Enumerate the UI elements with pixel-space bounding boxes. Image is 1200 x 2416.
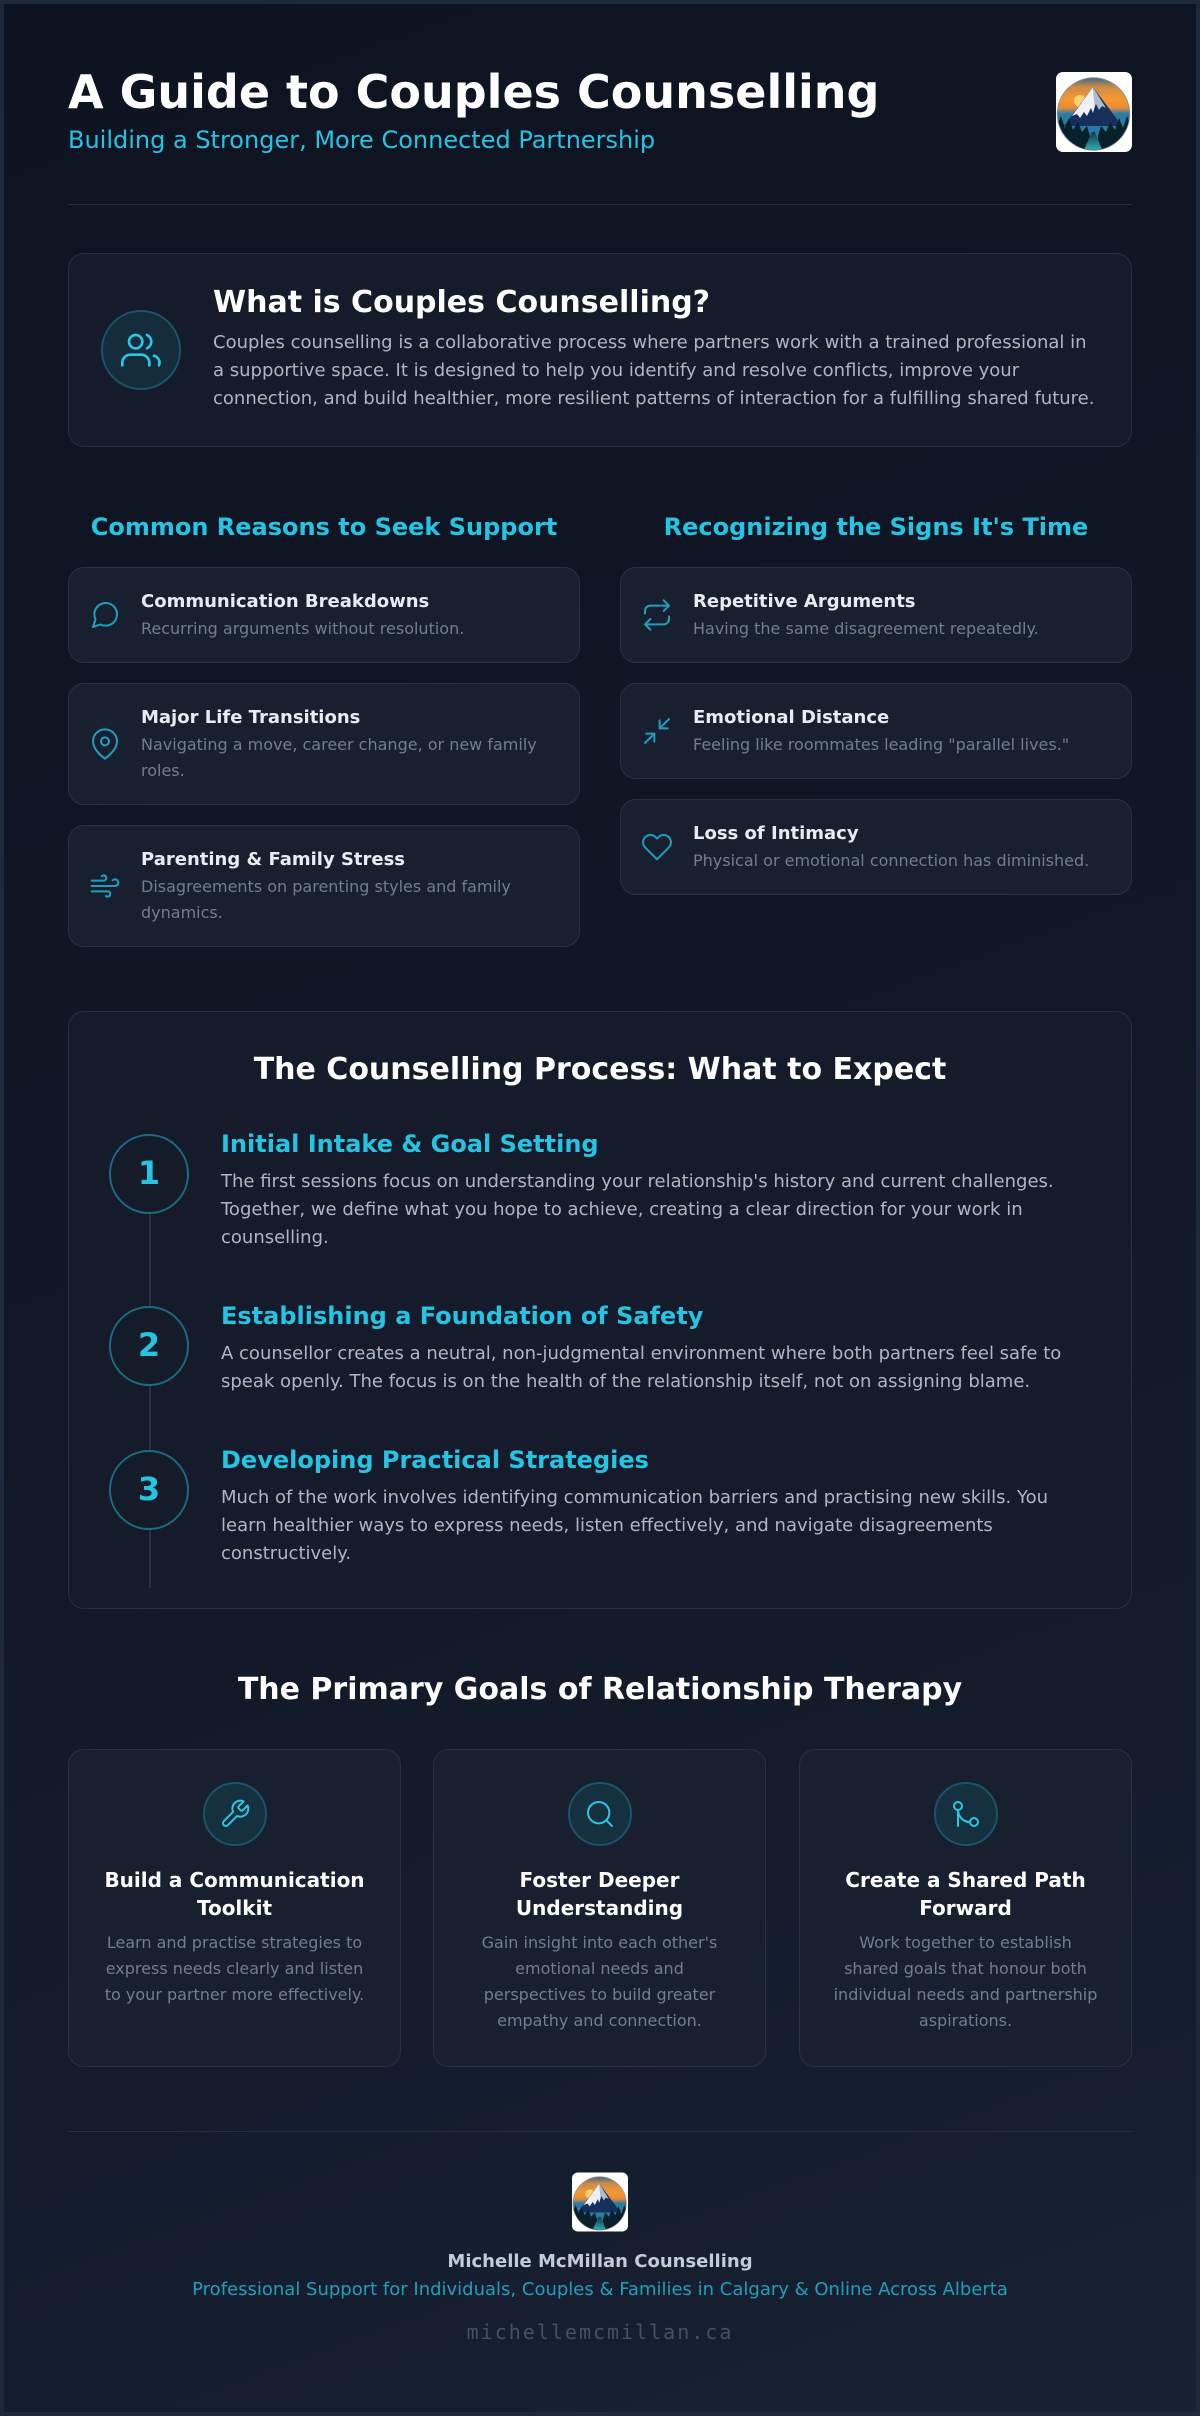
card: emotional distance bbox=[620, 683, 1132, 779]
card: loss of intimacy: Physical or emotional connection has diminished. bbox=[693, 851, 1089, 870]
card: major life transitions bbox=[68, 683, 580, 805]
panel: what is couples counselling bbox=[68, 253, 1132, 447]
step 3 text: constructively. bbox=[221, 1543, 351, 1564]
description: Couples counselling is a collaborative process where partners work with a trained professional in bbox=[213, 332, 1087, 353]
step 2 text: speak openly. The focus is on the health of the relationship itself, not on assigning blame. bbox=[221, 1371, 1030, 1392]
step 3 heading: Developing Practical Strategies bbox=[221, 1446, 649, 1474]
card: shared path: Create a Shared Path bbox=[845, 1868, 1086, 1892]
card: shared path: Work together to establish bbox=[859, 1933, 1072, 1952]
card: deeper understanding: emotional needs and bbox=[515, 1959, 684, 1978]
description: connection, and build healthier, more resilient patterns of interaction for a fulfilling shared future. bbox=[213, 388, 1094, 409]
icon: wrench bbox=[202, 1782, 266, 1846]
card: loss of intimacy bbox=[620, 799, 1132, 895]
card: communication breakdowns bbox=[68, 567, 580, 663]
step 1 text: Together, we define what you hope to achieve, creating a clear direction for your work in bbox=[221, 1199, 1023, 1220]
card: communication toolkit: to your partner more effectively. bbox=[105, 1985, 364, 2004]
card: parenting and family stress: dynamics. bbox=[141, 903, 223, 922]
heading: What is Couples Counselling? bbox=[213, 285, 710, 320]
card: shared path: Forward bbox=[919, 1896, 1012, 1920]
footer divider bbox=[68, 2131, 1132, 2132]
card: major life transitions: roles. bbox=[141, 761, 185, 780]
card: deeper understanding: Foster Deeper bbox=[520, 1868, 679, 1892]
card: major life transitions: Navigating a move, career change, or new family bbox=[141, 735, 537, 754]
description: a supportive space. It is designed to help you identify and resolve conflicts, improve your bbox=[213, 360, 1019, 381]
card: parenting and family stress bbox=[68, 825, 580, 947]
icon: users bbox=[101, 310, 181, 390]
panel: counselling process bbox=[68, 1011, 1132, 1609]
card: repetitive arguments: Repetitive Arguments bbox=[693, 591, 916, 612]
step 1 text bbox=[220, 1171, 1054, 1248]
card: deeper understanding: empathy and connection. bbox=[497, 2011, 702, 2030]
step 2 text: A counsellor creates a neutral, non-judgmental environment where both partners feel safe to bbox=[221, 1343, 1061, 1364]
footer name: Michelle McMillan Counselling bbox=[447, 2251, 753, 2272]
icon: merge path bbox=[934, 1782, 998, 1846]
step 2 heading: Establishing a Foundation of Safety bbox=[221, 1302, 703, 1330]
title: A Guide to Couples Counselling bbox=[68, 65, 879, 119]
card: communication toolkit: Toolkit bbox=[197, 1896, 272, 1920]
step 1 number: 1 bbox=[138, 1154, 160, 1192]
heading: counselling process: The Counselling Process: What to Expect bbox=[254, 1052, 946, 1087]
icon: search bbox=[568, 1782, 632, 1846]
card: communication toolkit: Learn and practise strategies to bbox=[107, 1933, 362, 1952]
step 3 number: 3 bbox=[138, 1470, 160, 1508]
step 3 text bbox=[221, 1487, 1048, 1564]
icon: mountain logo bbox=[1056, 72, 1132, 152]
card: communication breakdowns: Communication Breakdowns bbox=[141, 591, 429, 612]
card: deeper understanding: perspectives to build greater bbox=[484, 1985, 715, 2004]
card: communication toolkit: express needs clearly and listen bbox=[106, 1959, 363, 1978]
step 3 text: Much of the work involves identifying communication barriers and practising new skills. You bbox=[221, 1487, 1048, 1508]
card: communication toolkit: Build a Communication bbox=[104, 1868, 365, 1892]
step 3 number bbox=[109, 1450, 189, 1530]
card: deeper understanding bbox=[433, 1749, 766, 2067]
header divider bbox=[68, 204, 1132, 205]
subtitle: Building a Stronger, More Connected Partnership bbox=[68, 126, 655, 154]
card: parenting and family stress: Disagreements on parenting styles and family bbox=[141, 877, 511, 896]
step 1 text: counselling. bbox=[221, 1227, 329, 1248]
card: major life transitions: Major Life Transitions bbox=[141, 707, 360, 728]
icon: footer logo bbox=[572, 2172, 628, 2232]
footer website: michellemcmillan.ca bbox=[467, 2320, 733, 2344]
card: communication toolkit bbox=[68, 1749, 401, 2067]
heading: common reasons: Common Reasons to Seek Support bbox=[91, 513, 557, 541]
card: loss of intimacy: Loss of Intimacy bbox=[693, 823, 859, 844]
footer tagline: Professional Support for Individuals, Couples & Families in Calgary & Online Across Alberta bbox=[192, 2279, 1008, 2300]
step 2 number: 2 bbox=[138, 1326, 160, 1364]
card: shared path: shared goals that honour both bbox=[844, 1959, 1087, 1978]
step 3 text: learn healthier ways to express needs, listen effectively, and navigate disagreements bbox=[221, 1515, 993, 1536]
step 1 text: The first sessions focus on understanding your relationship's history and current challenges. bbox=[221, 1171, 1054, 1192]
step 2 number bbox=[109, 1306, 189, 1386]
heading: recognizing signs: Recognizing the Signs It's Time bbox=[664, 513, 1088, 541]
step 2 text bbox=[221, 1343, 1061, 1392]
card: deeper understanding: Understanding bbox=[516, 1896, 683, 1920]
card: deeper understanding: Gain insight into each other's bbox=[482, 1933, 717, 1952]
card: parenting and family stress: Parenting & Family Stress bbox=[141, 849, 405, 870]
card: emotional distance: Feeling like roommates leading "parallel lives." bbox=[693, 735, 1069, 754]
card: shared path: individual needs and partnership bbox=[834, 1985, 1097, 2004]
step 1 number bbox=[109, 1134, 189, 1214]
card: repetitive arguments bbox=[620, 567, 1132, 663]
step 1 heading: Initial Intake & Goal Setting bbox=[221, 1130, 599, 1158]
heading: primary goals: The Primary Goals of Relationship Therapy bbox=[238, 1672, 962, 1707]
card: repetitive arguments: Having the same disagreement repeatedly. bbox=[693, 619, 1039, 638]
card: emotional distance: Emotional Distance bbox=[693, 707, 889, 728]
card: shared path: aspirations. bbox=[919, 2011, 1012, 2030]
description bbox=[213, 332, 1094, 409]
card: communication breakdowns: Recurring arguments without resolution. bbox=[141, 619, 464, 638]
card: shared path bbox=[799, 1749, 1132, 2067]
